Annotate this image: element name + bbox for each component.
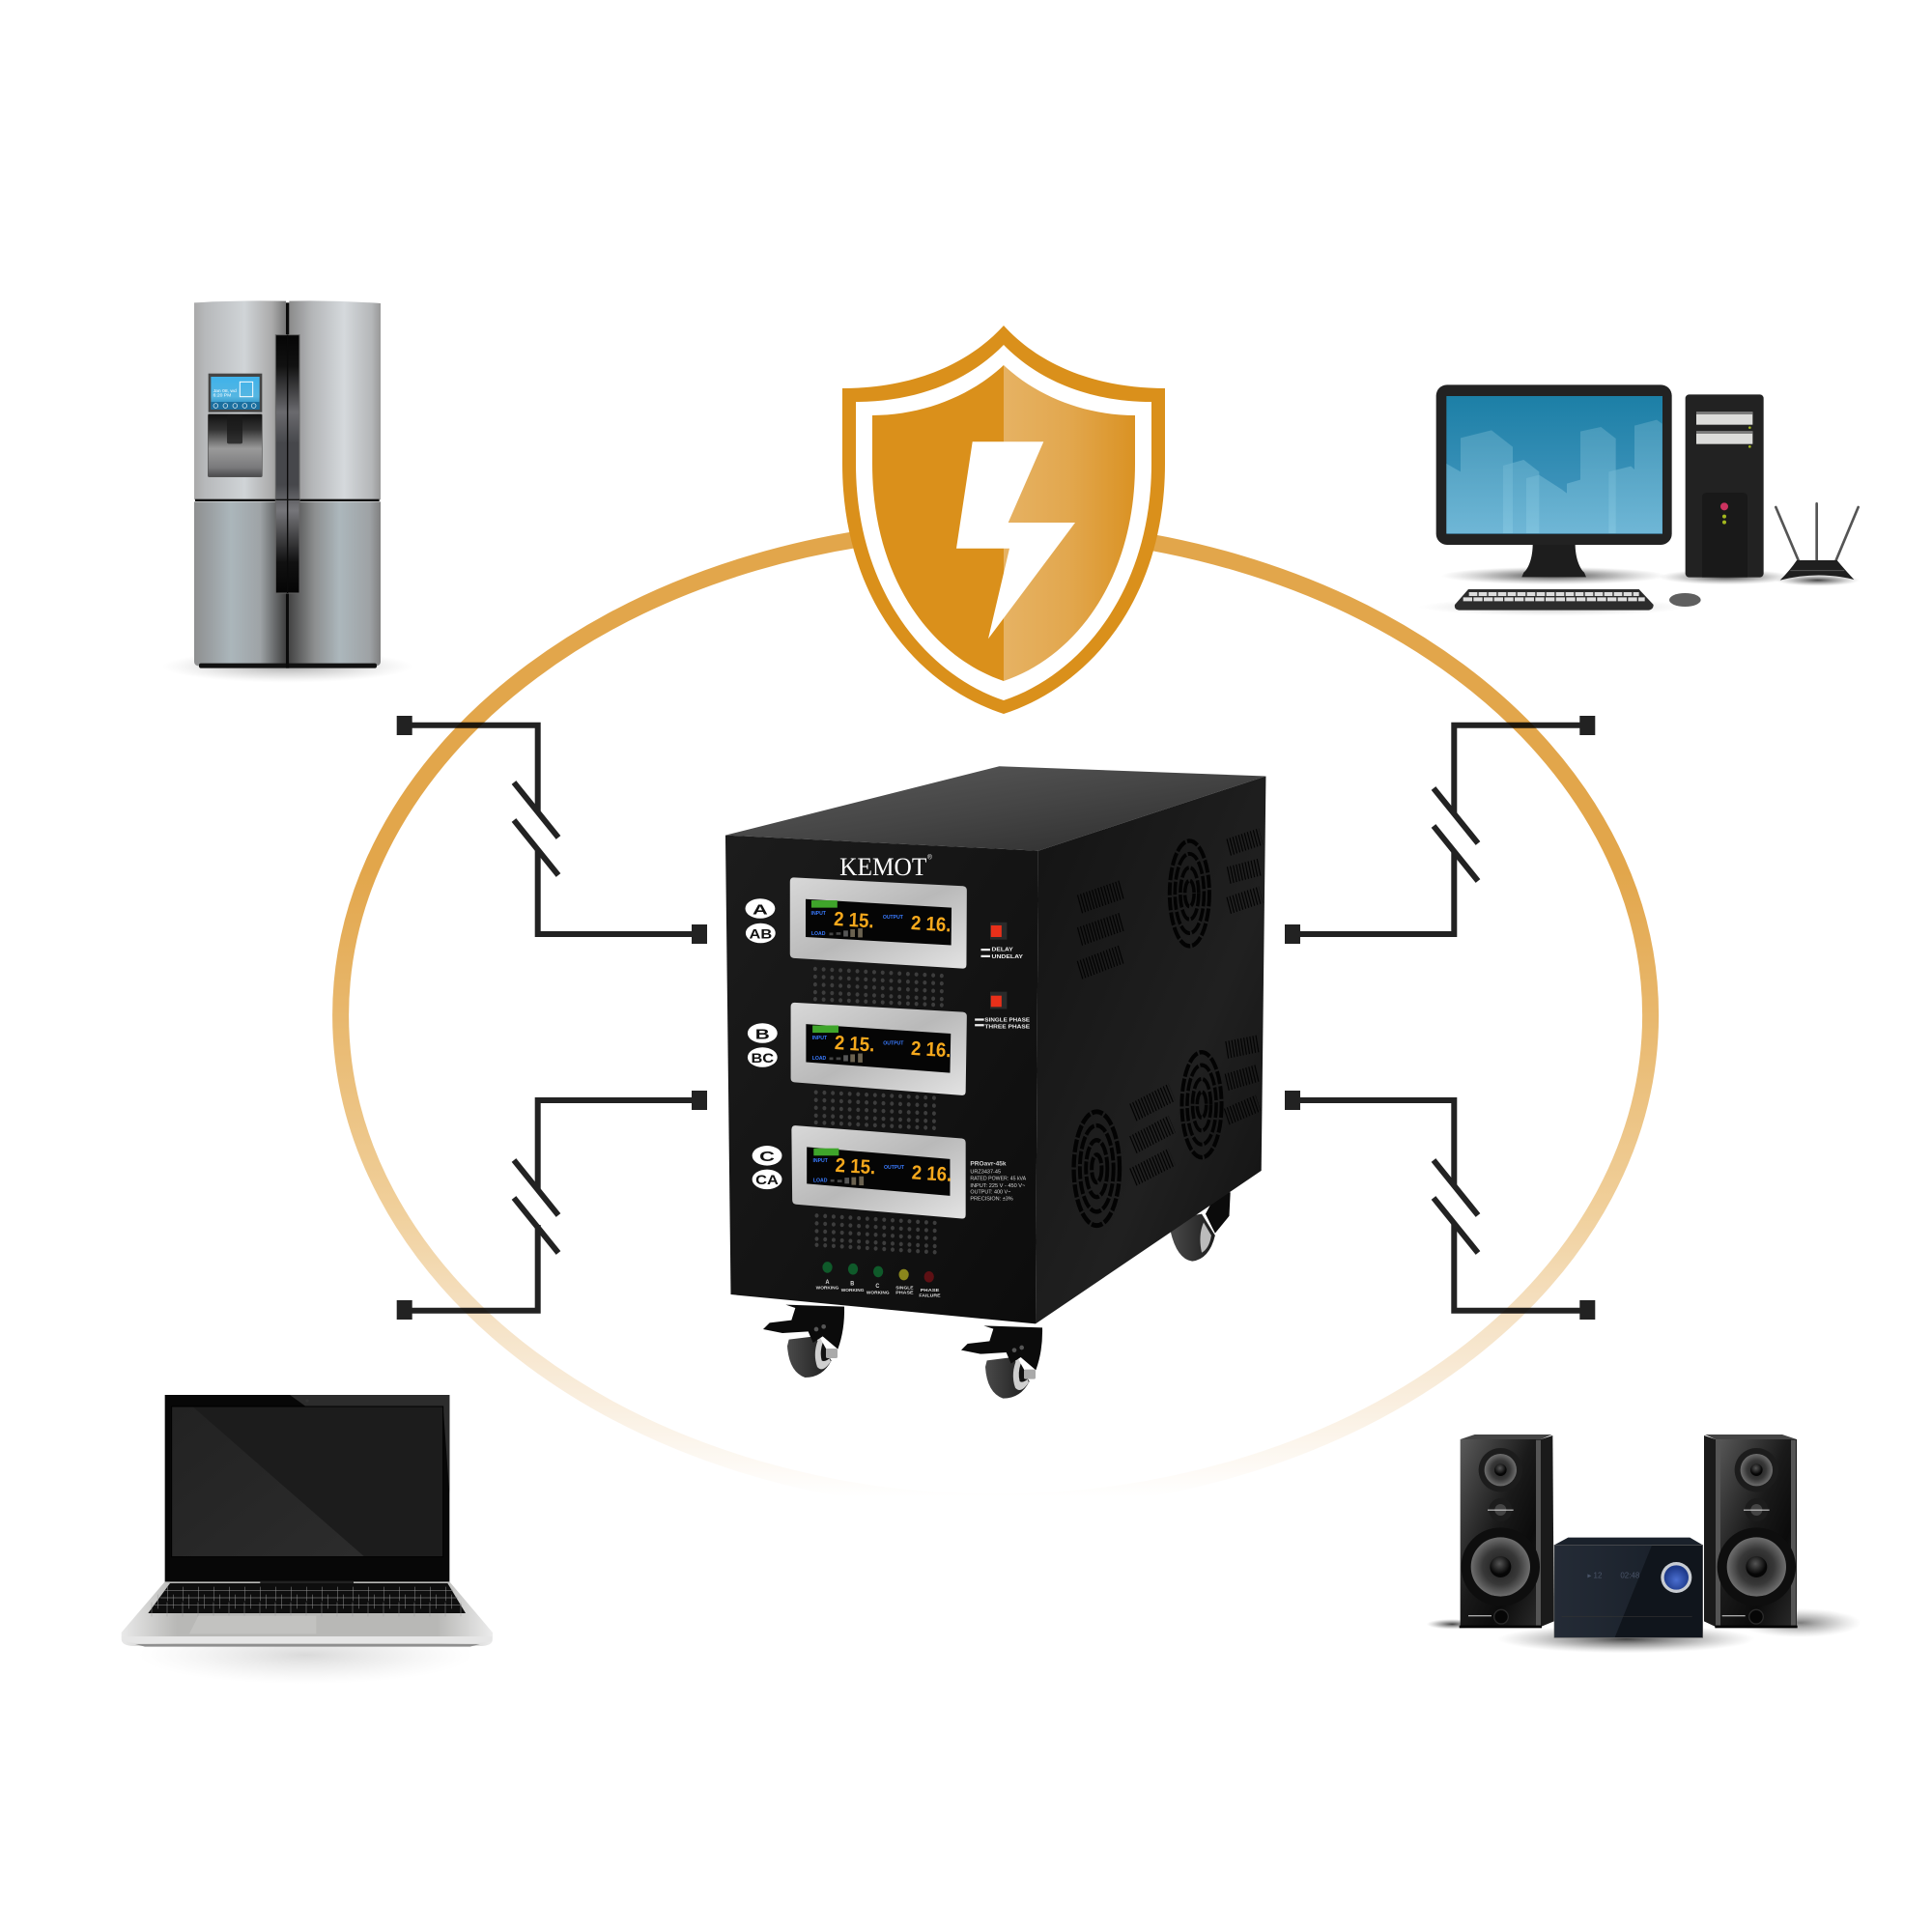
rating plate text: INPUT: 225 V - 450 V~ [970, 1183, 1025, 1189]
keyboard [1455, 589, 1654, 611]
front right caster [961, 1325, 1042, 1399]
voltage stabilizer cabinet [725, 766, 1265, 1323]
icon: stereo speakers and receiver [1427, 1435, 1861, 1653]
phase panel B [791, 1003, 967, 1095]
phase panel C: LOAD [813, 1178, 827, 1184]
rating plate text: PROavr-45k [970, 1161, 1007, 1168]
receiver unit [1554, 1538, 1703, 1637]
rating plate text [970, 1161, 1026, 1202]
status LED labels: B [850, 1281, 854, 1288]
status LED labels: WORKING [841, 1288, 865, 1293]
switch labels: SINGLE PHASE [984, 1017, 1030, 1024]
fridge touch screen: Jan 08, wd [213, 388, 237, 394]
status LED labels: C [875, 1284, 880, 1290]
phase panel B: LOAD [812, 1056, 826, 1062]
phase panel A [790, 877, 967, 969]
shield icon with lightning bolt [842, 326, 1165, 714]
side fan grille, upper [1170, 840, 1209, 946]
cabinet front face [725, 836, 1038, 1323]
phase badges [746, 898, 781, 1189]
laptop lid [165, 1395, 449, 1582]
fridge water dispenser [208, 414, 262, 477]
fridge touch screen: 6:20 PM [213, 393, 231, 399]
monitor [1436, 384, 1672, 577]
rating plate text: RATED POWER: 45 kVA [970, 1177, 1026, 1182]
phase panel C: 2 16. [911, 1161, 952, 1186]
computer tower [1686, 394, 1764, 578]
phase badges: BC [751, 1050, 774, 1065]
switch labels: UNDELAY [992, 954, 1023, 960]
phase badges: AB [749, 926, 773, 942]
connector: lower left phase line [397, 1091, 707, 1320]
phase badges: CA [755, 1173, 779, 1187]
status LED labels: A [826, 1280, 830, 1286]
phase badges: B [755, 1027, 770, 1043]
registered mark: ® [927, 853, 932, 862]
phase badges: A [753, 902, 768, 919]
fridge touch screen [209, 374, 262, 412]
phase panel B: 2 15. [834, 1032, 875, 1057]
laptop shadow [138, 1626, 473, 1684]
icon: laptop [122, 1395, 493, 1684]
switch labels: THREE PHASE [984, 1024, 1030, 1031]
phase panel C: 2 15. [835, 1154, 876, 1179]
fridge shadow [162, 650, 413, 683]
status LED labels: WORKING [867, 1290, 890, 1295]
rating plate text: OUTPUT: 400 V~ [970, 1189, 1010, 1196]
front left caster [763, 1305, 844, 1378]
phase panel A: OUTPUT [883, 915, 904, 921]
connector: upper right phase line [1285, 716, 1595, 944]
side fan grille, lower left [1074, 1112, 1120, 1226]
brand logo: KEMOT [839, 854, 926, 882]
side vents [1079, 837, 1261, 1178]
laptop trackpad [189, 1616, 316, 1634]
stereo shadows [1427, 1608, 1861, 1653]
phase panel B: INPUT [812, 1036, 828, 1041]
phase panel A: INPUT [811, 911, 827, 917]
status LED labels: WORKING [816, 1285, 839, 1291]
rating plate text: URZ3437-45 [970, 1169, 1001, 1176]
status LED labels: FAILURE [919, 1293, 941, 1297]
receiver unit: ▸ 12 [1587, 1571, 1603, 1579]
switch labels [975, 947, 1030, 1031]
right speaker [1704, 1435, 1798, 1628]
phase badges: C [759, 1149, 775, 1165]
connector: upper left phase line [397, 716, 707, 944]
phase panel B: 2 16. [910, 1037, 952, 1063]
status LED labels: SINGLE [895, 1285, 913, 1291]
rating plate text: PRECISION: ±3% [970, 1196, 1013, 1202]
rear wheel [1171, 1192, 1231, 1262]
fridge door handles [275, 335, 299, 593]
cabinet top face [725, 766, 1265, 851]
phase panel B: OUTPUT [883, 1040, 904, 1047]
laptop base [122, 1581, 493, 1647]
phase panel A: LOAD [811, 931, 825, 937]
fridge body [194, 300, 381, 668]
phase panel A: 2 16. [910, 912, 952, 937]
icon: refrigerator [162, 300, 413, 683]
status LED labels [816, 1280, 941, 1297]
laptop keyboard [148, 1583, 466, 1613]
mouse [1669, 593, 1701, 607]
side fan grille, lower right [1181, 1052, 1222, 1157]
phase panel A: 2 15. [834, 908, 874, 933]
icon: desktop computer with router [1418, 384, 1860, 616]
left speaker [1460, 1435, 1554, 1628]
phase panel C [791, 1125, 966, 1219]
status LED labels: PHASE [895, 1290, 913, 1295]
desk shadows [1418, 567, 1860, 616]
status LED labels: PHASE [921, 1288, 939, 1293]
protection ring ellipse [341, 528, 1651, 1502]
switch labels: DELAY [992, 947, 1013, 953]
cabinet side face [1036, 776, 1265, 1323]
connector: lower right phase line [1285, 1091, 1595, 1320]
perforated vents on front [815, 969, 943, 1253]
wifi router [1776, 503, 1859, 581]
phase panel C: INPUT [813, 1158, 829, 1164]
red rocker switches [990, 923, 1007, 1009]
receiver unit: 02:48 [1620, 1571, 1640, 1579]
status LEDs [822, 1262, 934, 1283]
phase panel C: OUTPUT [884, 1165, 905, 1171]
